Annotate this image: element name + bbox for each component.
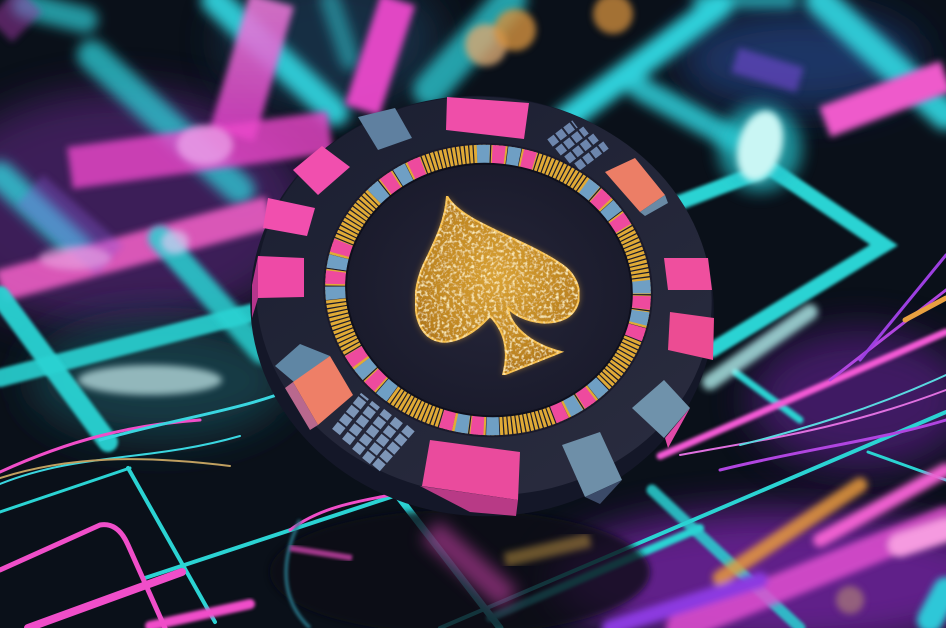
chip reflection [270,510,650,628]
chip body edge [229,73,735,539]
blurred pink bands [0,0,946,286]
poker chip [229,73,735,539]
edge dot grid, bottom left [336,396,411,468]
bokeh lights [465,0,633,66]
inner ring base [309,127,667,453]
edge dot grid, top right [550,124,606,167]
edge stripes: pink [252,97,714,516]
sharp cyan grid lines [0,168,946,628]
pink neon lines [0,255,946,628]
blurred stripes left of chip [39,125,233,395]
blurred cyan lines, far background [0,0,946,250]
edge stripes: slate blue [275,108,690,504]
icon: gold spade [415,196,579,375]
ring colored segments: blue [322,140,654,440]
edge stripes: salmon [285,158,668,430]
glowing cyan light [718,104,802,192]
ring colored segments: pink [322,140,654,440]
bottom right neon blur [610,470,946,628]
chip center disc [334,150,644,430]
chip top face [236,74,732,518]
gold tick ring [322,140,654,440]
